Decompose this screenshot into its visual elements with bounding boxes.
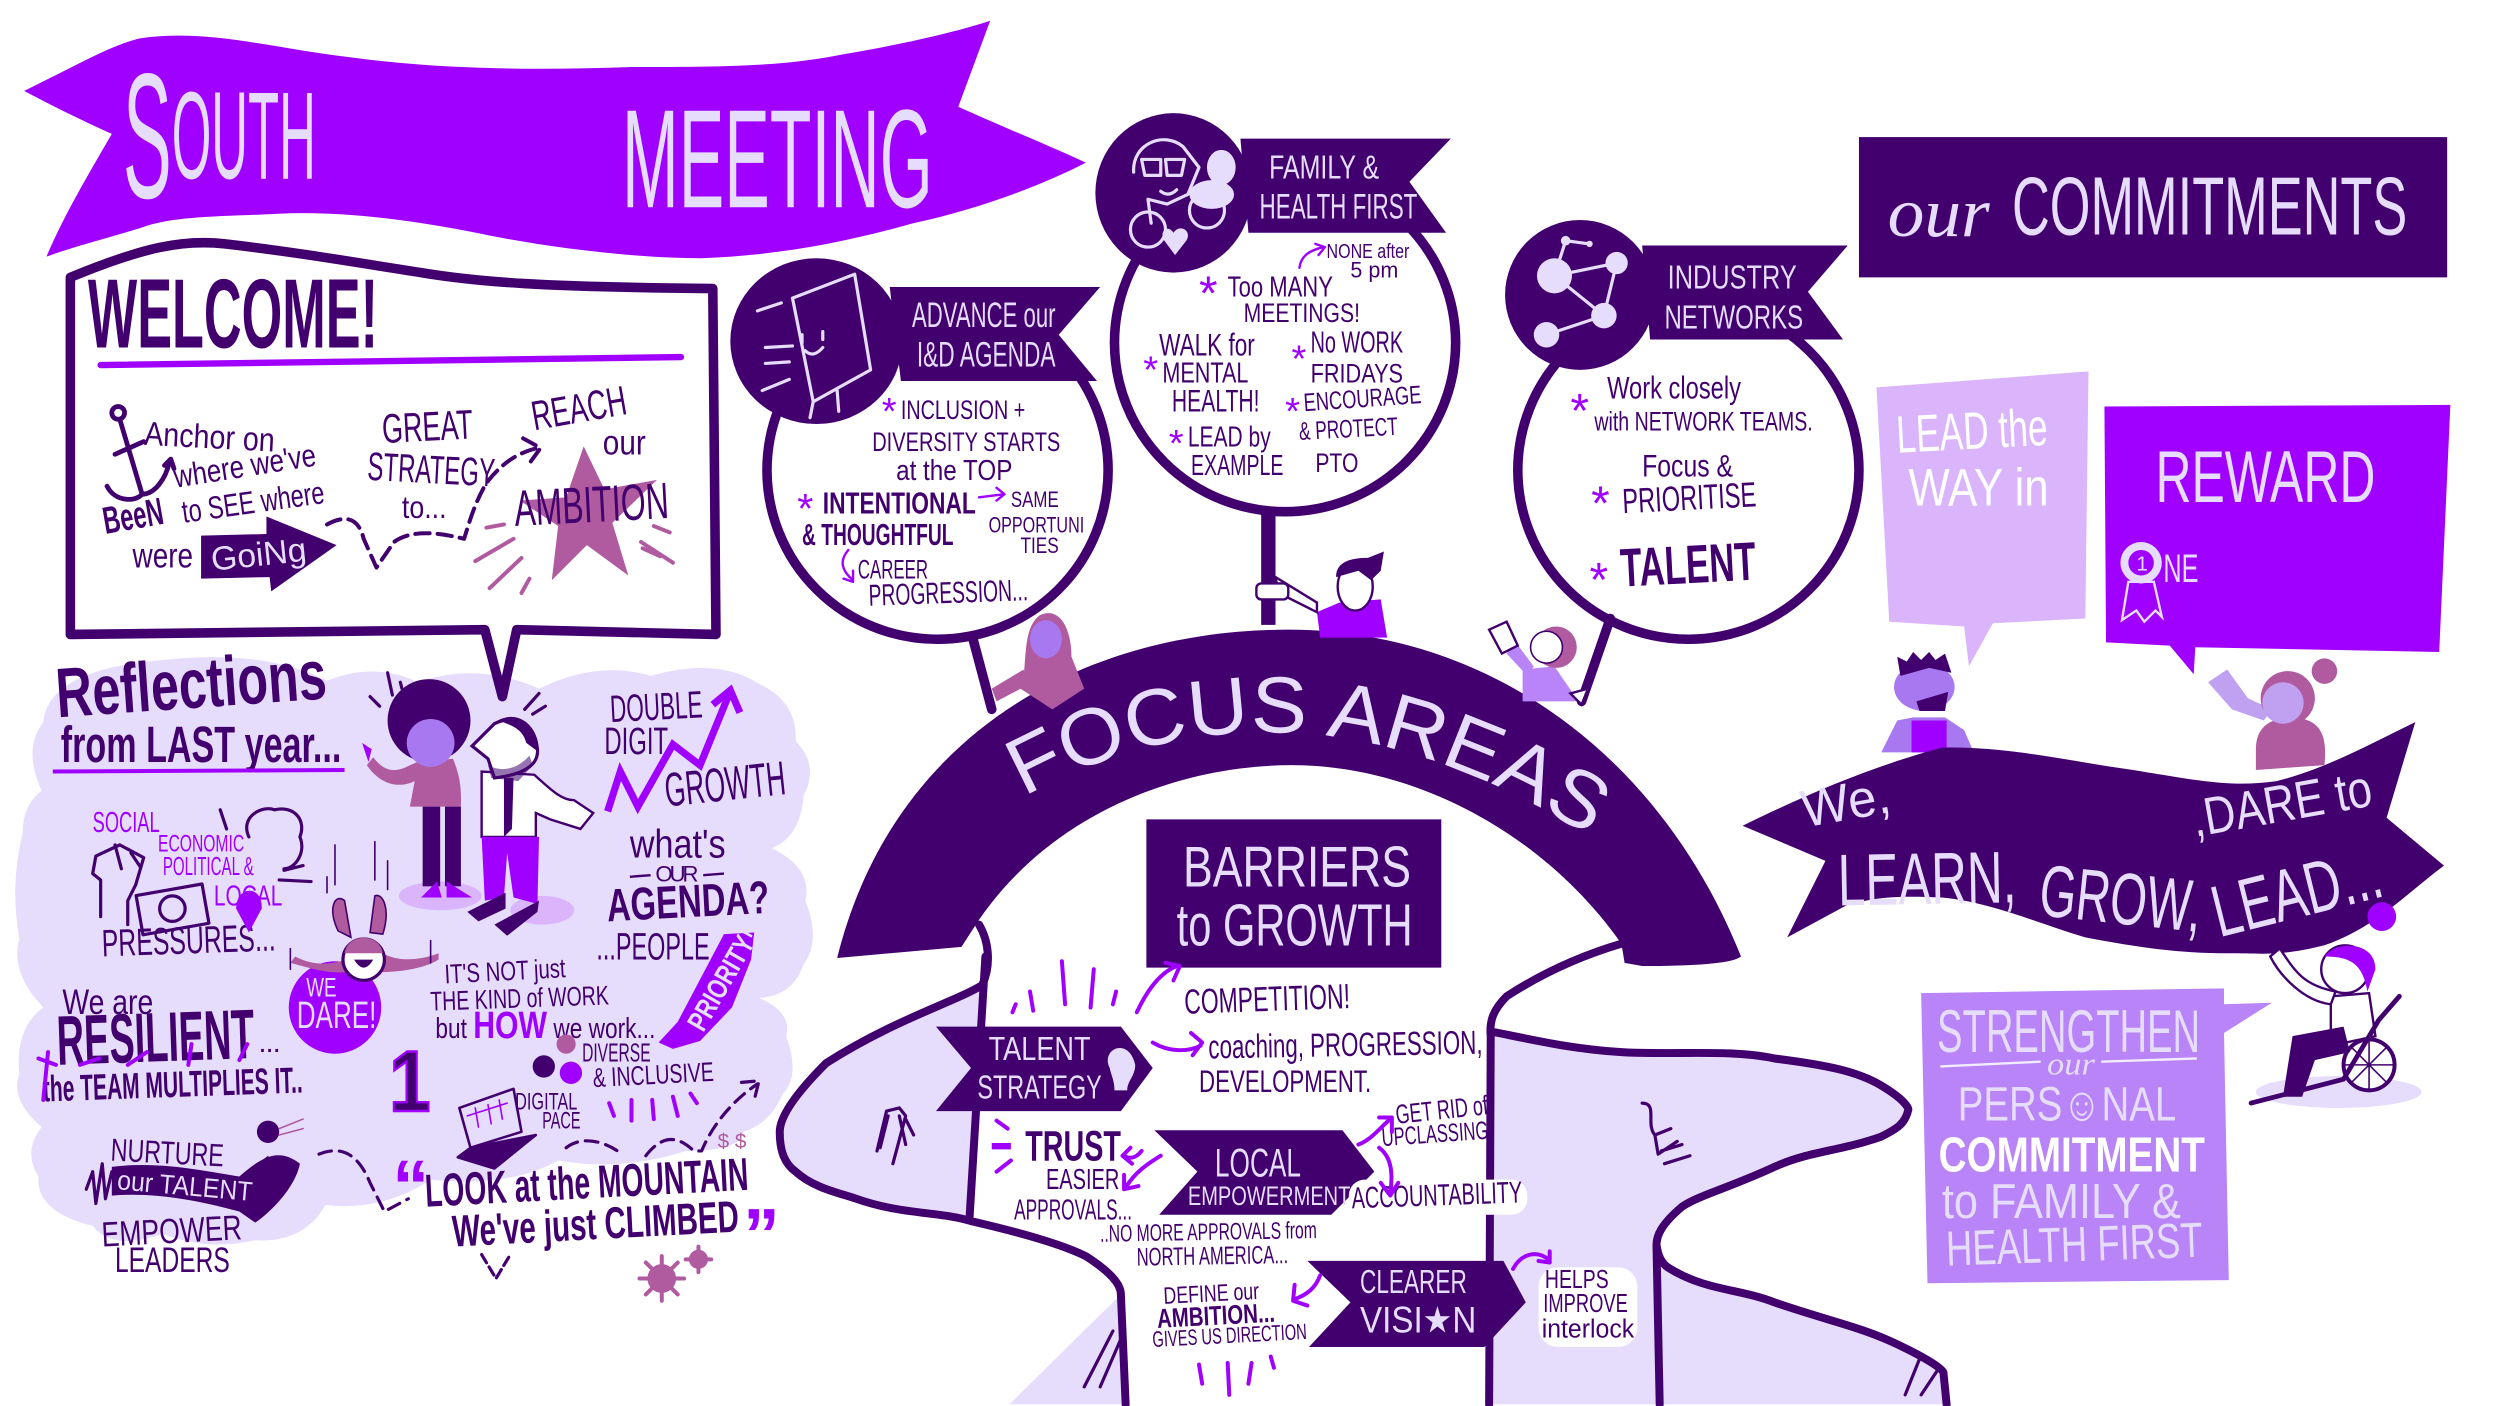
text: walk for mental health: LEAD by: [1188, 421, 1271, 453]
icon: anchor: [107, 406, 174, 499]
text: double digit growth chart: DIGIT: [604, 720, 668, 763]
text: we are resilient, team multiplies: We are: [62, 983, 153, 1022]
text: no more approvals: [1100, 1217, 1317, 1272]
chevron: local empowerment: EMPOWERMENT: [1188, 1180, 1350, 1211]
heading: reflections from last year: Reflections: [53, 636, 329, 732]
figure: woman in wheelchair: [2251, 902, 2422, 1108]
text: focus and prioritise: [1591, 448, 1757, 531]
text: digital pace, diverse inclusive: DIGITAL: [515, 1088, 577, 1115]
banner: industry networks: [1642, 245, 1848, 340]
text: double digit growth chart: GROWTH: [662, 752, 788, 818]
text: no more approvals: ..NO MORE APPROVALS from: [1100, 1217, 1317, 1248]
illustration: falling we dare figure: WE: [306, 971, 337, 1002]
text: focus and prioritise: Focus &: [1642, 448, 1733, 484]
heading: focus areas: [1024, 732, 1626, 861]
text: great strategy to: to...: [402, 489, 447, 525]
text: trust, easier approvals: TRUST: [1025, 1123, 1121, 1171]
icon: burst above talent strategy: [1012, 961, 1116, 1012]
speech bubble: reward one: NE: [2163, 547, 2198, 591]
banner: we dare to learn grow lead: LEAD...: [2203, 832, 2390, 953]
title banner: MEETING: [622, 80, 933, 237]
quote: look at the mountain: ”: [743, 1193, 780, 1275]
text: too many meetings: 5 pm: [1350, 257, 1398, 282]
text: focus and prioritise: *: [1591, 478, 1610, 531]
text: too many meetings: NONE after: [1327, 240, 1409, 263]
text: inclusion and diversity: DIVERSITY STARTS: [872, 426, 1060, 457]
chevron: local empowerment: LOCAL: [1215, 1141, 1301, 1185]
text: work closely with network teams: Work closely: [1607, 370, 1741, 406]
banner: family and health first: HEALTH FIRST: [1260, 187, 1417, 226]
text: great strategy to: STRATEGY: [366, 445, 496, 495]
text: nurture our talent, empower leaders: LEADERS: [115, 1241, 230, 1280]
text: double digit growth chart: DOUBLE: [609, 683, 704, 731]
heading: reflections from last year: [53, 636, 345, 773]
figure: waving woman with bun: [2208, 658, 2337, 770]
text: what's our agenda people: AGENDA?: [605, 871, 770, 931]
text: nurture our talent, empower leaders: [86, 1119, 303, 1280]
panel: welcome speech box: [70, 243, 716, 697]
arrow: going: GoiNg: [209, 532, 308, 579]
text: work closely with network teams: [1570, 370, 1813, 438]
illustration: falling we dare figure: DARE!: [297, 994, 376, 1037]
chevron: talent strategy: [936, 1027, 1153, 1111]
figure: waving girl: [1489, 622, 1588, 705]
text: too many meetings: MEETINGS!: [1244, 297, 1360, 328]
text: no work fridays, encourage: [1285, 326, 1422, 478]
panel: reflections from last year cloud: [15, 657, 813, 1245]
speech bubble: strengthen our personal commitment: COMMITMENT: [1939, 1128, 2205, 1183]
quote: look at the mountain: $ $: [718, 1130, 747, 1153]
text: it's not just the kind of work: but HOW we work...: [435, 1004, 655, 1047]
chevron: talent strategy: STRATEGY: [977, 1069, 1102, 1106]
text: nurture our talent, empower leaders: EMPOWER: [101, 1208, 243, 1255]
text: no work fridays, encourage: *: [1291, 337, 1306, 380]
text: inclusion and diversity: INTENTIONAL: [823, 487, 976, 520]
text: inclusion and diversity: OPPORTUNI: [989, 512, 1084, 537]
speech bubble: strengthen our personal commitment: STRENGTHEN: [1937, 997, 2200, 1065]
text: work closely with network teams: *: [1570, 385, 1589, 438]
text: social economic pressures: LOCAL: [214, 880, 282, 912]
speech bubble: strengthen our personal commitment: [1921, 988, 2272, 1283]
welcome heading: WELCOME!: [88, 259, 378, 369]
text: inclusion and diversity: SAME: [1011, 487, 1059, 512]
banner: advance our I&D agenda: I&D AGENDA: [917, 336, 1056, 375]
title banner: S: [123, 36, 172, 236]
text: double digit growth chart: [604, 683, 788, 818]
text: no work fridays, encourage: *: [1285, 390, 1300, 433]
text: competition, coaching, development: coaching, PROGRESSION,: [1208, 1025, 1483, 1066]
text: inclusion and diversity: INCLUSION +: [901, 394, 1025, 425]
speech bubble: reward one: [2104, 405, 2450, 674]
text: no work fridays, encourage: & PROTECT: [1298, 413, 1398, 446]
text: walk for mental health: *: [1143, 349, 1158, 392]
text: walk for mental health: HEALTH!: [1172, 382, 1260, 418]
speech bubble: strengthen our personal commitment: HEALTH FIRST: [1945, 1213, 2204, 1277]
text: what's our agenda people: what's: [629, 823, 726, 867]
text: social economic pressures: ECONOMIC: [158, 830, 244, 857]
text: it's not just the kind of work: THE KIND of WORK: [430, 979, 609, 1017]
banner: priority: PRIORITY!: [682, 924, 765, 1036]
text: inclusion and diversity: & THOUGHTFUL: [802, 519, 953, 552]
icon: number one: 1: [389, 1034, 431, 1130]
speech bubble: strengthen our personal commitment: PERS☺NAL: [1958, 1079, 2176, 1132]
text: no work fridays, encourage: No WORK: [1311, 326, 1403, 359]
speech bubble: lead the way in: WAY in: [1908, 458, 2049, 517]
text: define our ambition: AMBITION...: [1156, 1297, 1276, 1334]
text: inclusion and diversity: PROGRESSION...: [868, 574, 1029, 613]
title banner: OUTH: [172, 67, 316, 206]
text: inclusion and diversity: [797, 390, 1084, 613]
speech bubble: reward one: REWARD: [2155, 436, 2375, 518]
heading: our commitments: [1859, 137, 2447, 277]
text: trust, easier approvals: [992, 1121, 1161, 1226]
speech bubble: lead the way in: LEAD the: [1895, 398, 2049, 465]
banner: we dare to learn grow lead: ,DARE to: [2187, 759, 2376, 849]
arrow: dashed path to mountain quote: [319, 1081, 759, 1212]
text: get rid of upclassing, accountability: ACCOUNTABILITY: [1351, 1176, 1523, 1215]
text: digital pace, diverse inclusive: PACE: [542, 1108, 580, 1135]
banner: we dare to learn grow lead: [1743, 722, 2444, 954]
text: digital pace, diverse inclusive: DIVERSE: [582, 1040, 651, 1068]
text: anchor on where we've been: to SEE where: [180, 474, 327, 530]
text: walk for mental health: EXAMPLE: [1191, 450, 1283, 482]
text: trust, easier approvals: APPROVALS...: [1014, 1194, 1132, 1226]
text: work closely with network teams: with NETWORK TEAMS.: [1594, 405, 1813, 436]
banner: family and health first: [1240, 139, 1451, 233]
text: walk for mental health: [1143, 326, 1283, 482]
text: trust, easier approvals: EASIER: [1046, 1164, 1119, 1196]
road: left lavender lobe: [780, 925, 1127, 1404]
text: nurture our talent, empower leaders: our TALENT: [116, 1164, 254, 1207]
figure: man holding pole: [1256, 552, 1387, 638]
text: competition, coaching, development: [1184, 977, 1483, 1099]
text: too many meetings: *: [1199, 267, 1218, 320]
callout: helps improve interlock: [1513, 1251, 1637, 1347]
text: social economic pressures: PRESSURES...: [101, 916, 276, 965]
speech bubble: strengthen our personal commitment: our: [2047, 1046, 2096, 1081]
text: define our ambition: GIVES US DIRECTION: [1152, 1319, 1307, 1352]
text: great strategy to: [366, 400, 496, 525]
text: it's not just the kind of work: [430, 952, 655, 1047]
text: focus and prioritise: PRIORITISE: [1621, 475, 1757, 521]
icon: fist, money, cloud, pin: [93, 809, 311, 935]
text: digital pace, diverse inclusive: [515, 1035, 715, 1135]
text: define our ambition: [1152, 1275, 1320, 1395]
road: right lavender lobe: [1488, 944, 1947, 1404]
text: digital pace, diverse inclusive: & INCLUSIVE: [592, 1056, 715, 1093]
banner: priority: [659, 924, 765, 1049]
banner: we dare to learn grow lead: GROW,: [2036, 849, 2206, 948]
speech bubble: strengthen our personal commitment: to FAMILY &: [1942, 1174, 2181, 1229]
callout: helps improve interlock: HELPS: [1545, 1266, 1609, 1294]
icon: book: [730, 258, 902, 424]
icon: medal: [2120, 542, 2162, 622]
text: what's our agenda people: ...PEOPLE: [596, 926, 710, 969]
text: walk for mental health: *: [1169, 422, 1184, 465]
banner: industry networks: INDUSTRY: [1668, 260, 1797, 297]
callout: helps improve interlock: interlock: [1542, 1315, 1634, 1343]
panel: advance I&D agenda circle: [730, 258, 1108, 709]
text: talent: [1590, 532, 1757, 607]
chevron: clearer vision: VISI★N: [1360, 1300, 1476, 1341]
text: talent: *: [1590, 554, 1608, 607]
arrow: dashed strategy path: [327, 438, 541, 568]
text: walk for mental health: MENTAL: [1162, 358, 1248, 390]
text: great strategy to: GREAT: [381, 400, 474, 452]
text: we are resilient, team multiplies: the TEAM MULTIPLIES IT..: [42, 1059, 303, 1110]
text: anchor on where we've been: Anchor on: [143, 416, 276, 460]
text: social economic pressures: [93, 807, 282, 965]
banner: advance our I&D agenda: ADVANCE our: [912, 296, 1056, 335]
text: walk for mental health: WALK for: [1159, 326, 1255, 362]
text: inclusion and diversity: CAREER: [858, 554, 928, 585]
heading: barriers to growth: [1146, 819, 1441, 968]
text: we are resilient, team multiplies: [38, 983, 303, 1110]
text: anchor on where we've been: BeeN: [100, 490, 167, 543]
text: inclusion and diversity: *: [882, 390, 897, 433]
icon: star ambition: [475, 446, 673, 593]
illustration: woman and man: [362, 673, 593, 936]
heading: reflections from last year: from LAST year...: [61, 716, 341, 773]
icon: laptop: [458, 1089, 536, 1168]
chevron: clearer vision: [1307, 1261, 1526, 1347]
banner: we dare to learn grow lead: LEARN,: [1837, 836, 2017, 921]
text: no work fridays, encourage: PTO: [1315, 447, 1358, 478]
figure: man on banner: [1881, 652, 1974, 752]
text: talent: TALENT: [1619, 532, 1757, 599]
icon: network: [1505, 220, 1655, 370]
text: inclusion and diversity: at the TOP: [896, 455, 1012, 487]
quote: look at the mountain: LOOK at the MOUNTAIN: [424, 1148, 750, 1217]
text: anchor on where we've been: where we've: [170, 437, 318, 495]
text: no more approvals: NORTH AMERICA...: [1136, 1241, 1288, 1272]
text: too many meetings: Too MANY: [1228, 272, 1333, 304]
panel: industry networks circle: [1489, 220, 1859, 705]
banner: advance our I&D agenda: [890, 287, 1100, 381]
panel: family and health first circle: [1095, 113, 1456, 638]
text: no work fridays, encourage: FRIDAYS: [1311, 358, 1403, 389]
quote: look at the mountain: [392, 1130, 780, 1278]
chevron: clearer vision: CLEARER: [1360, 1264, 1467, 1301]
speech bubble: lead the way in: [1876, 371, 2088, 666]
figure: woman in hijab: [992, 613, 1084, 709]
text: reach our ambition: REACH: [528, 376, 630, 439]
banner: industry networks: NETWORKS: [1664, 299, 1803, 336]
text: inclusion and diversity: *: [797, 485, 813, 532]
panel: focus areas arch: [837, 630, 1741, 966]
text: inclusion and diversity: TIES: [1020, 533, 1059, 558]
arrow: going: [201, 516, 337, 591]
arrows: talent strategy: [1137, 963, 1202, 1055]
icon: family: [1095, 113, 1252, 273]
text: social economic pressures: POLITICAL &: [163, 853, 254, 881]
panel: focus areas arch: FOCUS AREAS: [1005, 676, 1608, 828]
text: get rid of upclassing, accountability: GET RID of: [1394, 1089, 1490, 1130]
quote: look at the mountain: We've just CLIMBED: [451, 1193, 740, 1257]
text: reach our ambition: our: [603, 423, 646, 462]
title banner: [24, 21, 1086, 258]
illustration: falling we dare figure: [289, 842, 439, 1054]
text: nurture our talent, empower leaders: NURTURE: [110, 1132, 225, 1173]
text: get rid of upclassing, accountability: UPCLASSING: [1381, 1117, 1489, 1152]
text: anchor on where we've been: were: [132, 537, 193, 576]
icon: virus: [639, 1247, 711, 1301]
text: we are resilient, team multiplies: ...: [258, 1027, 281, 1059]
banner: family and health first: FAMILY &: [1269, 150, 1379, 187]
banner: we dare to learn grow lead: We,: [1797, 766, 1895, 839]
quote: look at the mountain: “: [392, 1146, 429, 1228]
text: no work fridays, encourage: ENCOURAGE: [1303, 381, 1422, 417]
text: define our ambition: DEFINE our: [1163, 1278, 1260, 1310]
text: competition, coaching, development: COMPETITION!: [1184, 977, 1351, 1022]
text: what's our agenda people: [596, 823, 770, 969]
heading: barriers to growth: BARRIERS: [1183, 835, 1411, 899]
text: it's not just the kind of work: IT'S NOT just: [444, 952, 567, 990]
heading: barriers to growth: to GROWTH: [1177, 893, 1413, 958]
callout: helps improve interlock: IMPROVE: [1543, 1290, 1628, 1318]
text: what's our agenda people: OUR: [655, 862, 698, 887]
text: get rid of upclassing, accountability: [1349, 1089, 1527, 1215]
text: reach our ambition: [513, 376, 670, 537]
text: reach our ambition: AMBITION: [513, 472, 670, 537]
chevron: talent strategy: TALENT: [989, 1031, 1091, 1068]
text: too many meetings: [1199, 240, 1409, 328]
text: we are resilient, team multiplies: RESILIENT: [55, 995, 256, 1080]
text: anchor on where we've been: [100, 416, 327, 576]
text: social economic pressures: SOCIAL: [93, 807, 160, 839]
icon: medal: 1: [2136, 553, 2148, 576]
chevron: local empowerment: [1154, 1130, 1374, 1215]
text: competition, coaching, development: DEVELOPMENT.: [1199, 1063, 1371, 1099]
heading: our commitments: our: [1888, 174, 1990, 252]
